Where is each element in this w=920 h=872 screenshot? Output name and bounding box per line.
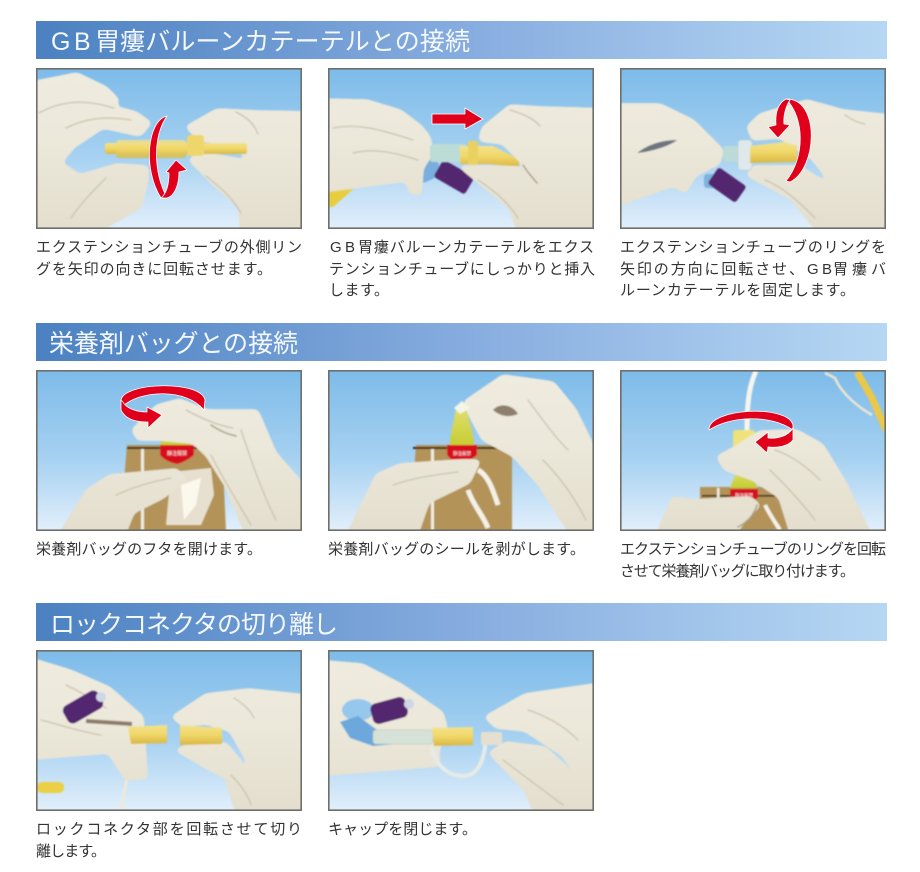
red rotation arrow	[768, 99, 811, 182]
red label	[447, 445, 477, 464]
captions row 1: ルーンカテーテルを固定します。	[620, 282, 855, 299]
heading banner: GB catheter connection: 胃瘻バルーンカテーテルとの接続	[95, 28, 470, 56]
purple cap	[61, 688, 132, 726]
photo panel: fix with ring	[620, 68, 886, 229]
left hand	[343, 461, 479, 545]
left hand	[21, 661, 146, 779]
heading banner: lock connector separation: ロックコネクタの切り離し	[50, 611, 338, 639]
captions row 2: 栄養剤バッグのフタを開けます。	[36, 541, 262, 558]
red label: 静注厳禁	[735, 492, 753, 499]
translucent connector	[373, 730, 433, 744]
captions row 1: G	[807, 261, 819, 278]
captions row 3: キャップを閉じます。	[328, 821, 477, 838]
photo panel: rotate outer ring	[36, 68, 302, 229]
heading banner: nutrient bag connection: 栄養剤バッグとの接続	[49, 330, 298, 358]
captions row 2: 栄養剤バッグのシールを剥がします。	[328, 541, 585, 558]
connector and yellow tube	[723, 140, 797, 170]
distant yellow connector with thin tube	[825, 372, 886, 430]
captions row 1: します。	[329, 282, 389, 299]
red label	[730, 489, 758, 502]
yellow connector left half	[128, 725, 167, 744]
captions row 3: ロックコネクタ部を回転させて切り	[36, 821, 302, 838]
yellow connector right half	[180, 725, 222, 745]
photo panel: open bag cap	[36, 370, 302, 531]
cap tether arc	[432, 736, 486, 776]
red rotation arrow	[121, 386, 205, 428]
right hand	[133, 400, 316, 545]
captions row 1: G	[330, 239, 342, 256]
heading banner: GB catheter connection: B	[74, 28, 91, 56]
captions row 1: 胃瘻バルーンカテーテルをエクス	[358, 239, 594, 256]
nutrient bag	[700, 487, 788, 531]
spout and yellow ring	[730, 430, 757, 488]
nutrient bag	[410, 445, 512, 531]
red rotation arrow	[709, 411, 793, 453]
right hand	[465, 376, 608, 545]
right hand	[748, 101, 900, 243]
captions row 1: エクステンションチューブの外側リン	[36, 238, 302, 256]
yellow catheter tail	[328, 183, 360, 207]
left hand	[653, 498, 759, 545]
left hand	[313, 100, 432, 194]
right hand	[486, 683, 608, 825]
captions row 3: 離します。	[36, 843, 106, 860]
captions row 1: B	[345, 239, 355, 256]
captions row 1: エクステンションチューブのリングを	[620, 238, 886, 256]
yellow connector	[432, 727, 473, 746]
heading banner: GB catheter connection	[36, 21, 887, 59]
photo panel: close cap	[328, 650, 594, 811]
left hand	[605, 105, 722, 209]
red label: 静注厳禁	[453, 450, 471, 457]
red rotation arrow	[149, 116, 187, 198]
left hand	[54, 470, 185, 545]
captions row 2: させて栄養剤バッグに取り付けます。	[620, 563, 855, 580]
captions row 2: エクステンションチューブのリングを回転	[620, 540, 886, 558]
blue tube	[340, 716, 406, 746]
photo panel: insert catheter	[328, 68, 594, 229]
heading banner: lock connector separation	[36, 603, 887, 641]
thin tube and yellow tip	[37, 750, 132, 810]
nutrient bag	[120, 445, 226, 531]
red label	[160, 445, 194, 464]
left hand	[21, 74, 150, 243]
captions row 1: グを矢印の向きに回転させます。	[36, 261, 272, 278]
yellow connector tube	[105, 135, 247, 158]
red push arrow	[432, 108, 483, 129]
photo panel: attach extension tube	[620, 370, 886, 531]
captions row 1: 胃瘻バ	[833, 261, 886, 278]
captions row 2	[36, 540, 886, 580]
spout	[450, 406, 474, 446]
right hand	[173, 690, 316, 825]
right hand	[718, 431, 875, 545]
white tube	[747, 371, 756, 432]
cap	[481, 732, 502, 745]
right hand	[461, 106, 608, 243]
heading banner: nutrient bag connection	[36, 323, 887, 361]
purple cap	[704, 167, 747, 203]
captions row 3	[36, 821, 477, 860]
purple cap with blue hub	[413, 156, 475, 195]
heading banner: GB catheter connection: G	[51, 28, 70, 56]
right hand	[187, 110, 316, 243]
left hand	[313, 661, 446, 775]
captions row 1: 矢印の方向に回転させ、	[620, 261, 804, 278]
purple cap	[369, 696, 414, 725]
photo panel: peel seal	[328, 370, 594, 531]
captions row 1	[36, 238, 886, 299]
spout	[160, 426, 192, 446]
peeled white seal	[454, 401, 470, 414]
captions row 1: テンションチューブにしっかりと挿入	[329, 260, 595, 278]
captions row 1: B	[822, 261, 832, 278]
photo panel: separate lock connector	[36, 650, 302, 811]
red label: 静注厳禁	[167, 450, 187, 457]
translucent connector and yellow tube	[430, 141, 520, 167]
